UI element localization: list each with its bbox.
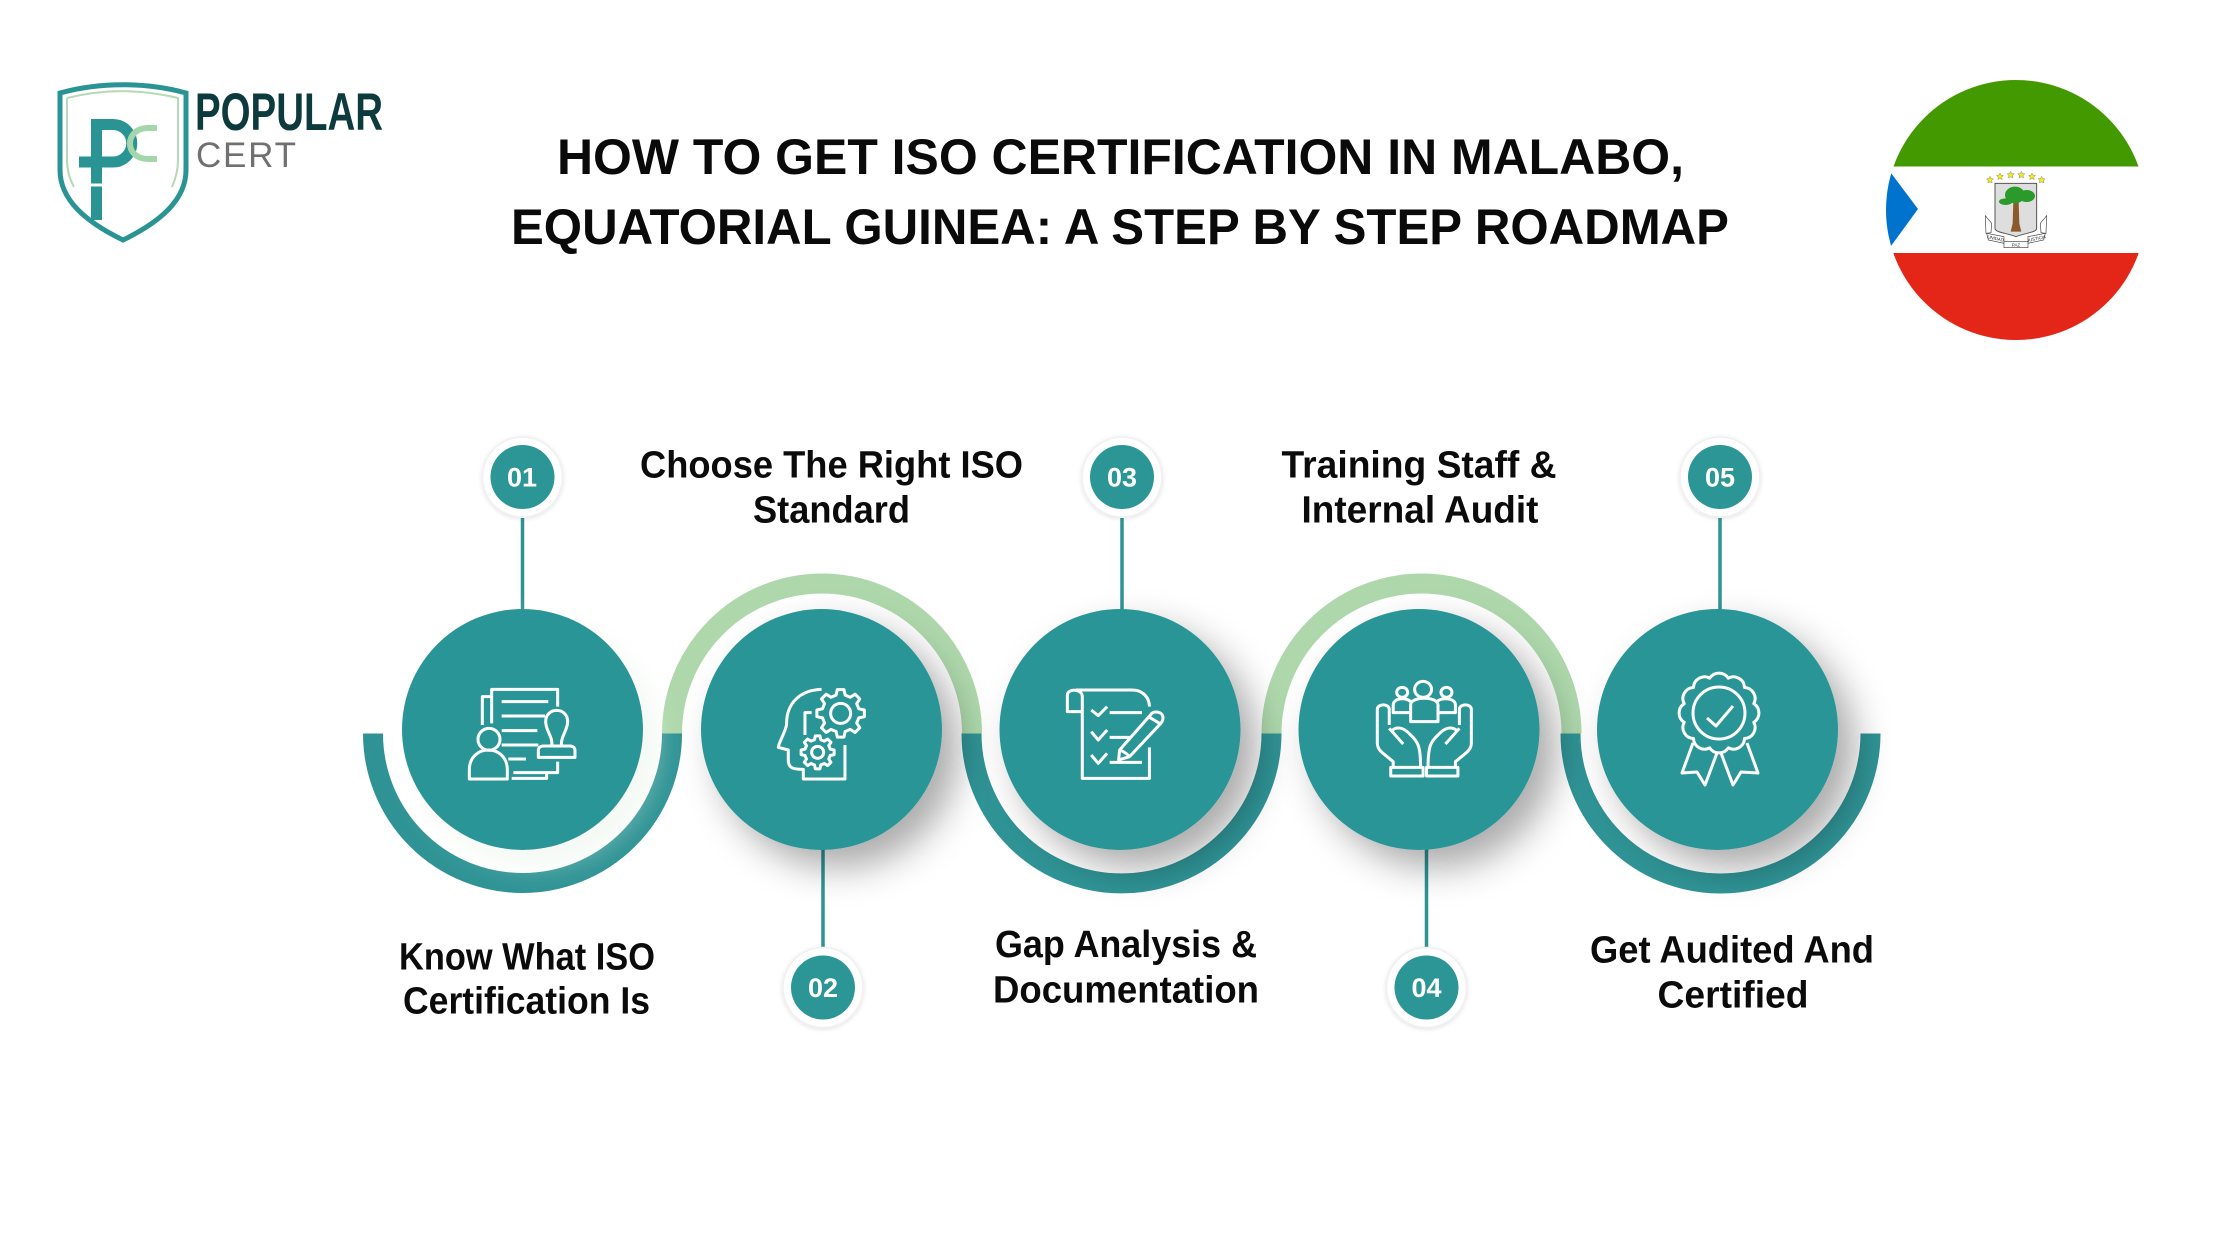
logo wordmark: POPULAR <box>195 83 383 142</box>
logo shield <box>60 85 186 240</box>
badge 03: 03 <box>1107 462 1137 492</box>
label: step 2 <box>640 444 1023 532</box>
icon: documents, person and stamp <box>469 689 575 779</box>
flag emblem <box>1985 171 2047 248</box>
label: step 2: Choose The Right ISO <box>640 444 1023 486</box>
step 5 circle <box>1597 609 1838 850</box>
icon: head with gears <box>778 689 864 779</box>
badge 02 <box>783 948 863 1028</box>
flag stripes <box>1886 80 2139 340</box>
step 3 circle <box>1000 609 1240 850</box>
step 2 circle <box>701 609 942 850</box>
title: HOW TO GET ISO CERTIFICATION IN MALABO, <box>557 129 1684 185</box>
flag emblem: JUSTICIA <box>2026 234 2046 243</box>
label: step 4: Internal Audit <box>1302 490 1539 532</box>
icon: hands holding team <box>1377 681 1471 776</box>
badge 01 <box>482 437 562 517</box>
label: step 3: Documentation <box>993 970 1259 1012</box>
badge 04: 04 <box>1411 973 1442 1003</box>
label: step 3 <box>993 924 1259 1012</box>
label: step 5 <box>1590 930 1874 1016</box>
logo wordmark <box>195 83 383 175</box>
label: step 5: Get Audited And <box>1590 930 1874 972</box>
flag emblem: UNIDAD <box>1987 234 2004 243</box>
step 4 circle <box>1298 609 1540 850</box>
connector lines <box>522 518 1720 947</box>
badge 04 <box>1386 948 1466 1028</box>
title: EQUATORIAL GUINEA: A STEP BY STEP ROADMAP <box>511 199 1729 255</box>
title <box>511 129 1729 255</box>
icon: award rosette <box>1679 673 1759 785</box>
label: step 3: Gap Analysis & <box>995 924 1257 966</box>
label: step 1: Certification Is <box>403 980 650 1022</box>
logo: Popular Cert <box>60 83 383 240</box>
badge 01: 01 <box>507 462 537 492</box>
label: step 4: Training Staff & <box>1282 444 1556 486</box>
label: step 1 <box>399 936 655 1022</box>
roadmap: wave arcs <box>373 584 1870 884</box>
step 1 circle <box>402 609 643 850</box>
badge 05 <box>1680 437 1760 517</box>
badge 05: 05 <box>1705 462 1735 492</box>
badge 02: 02 <box>808 973 838 1003</box>
icon: checklist and pencil <box>1067 690 1163 778</box>
label: step 4 <box>1282 444 1556 532</box>
flag emblem: PAZ <box>2012 243 2020 248</box>
flag: Equatorial Guinea <box>1886 80 2139 340</box>
badge 03 <box>1082 437 1162 517</box>
label: step 5: Certified <box>1658 974 1808 1016</box>
label: step 1: Know What ISO <box>399 936 655 978</box>
label: step 2: Standard <box>753 490 910 532</box>
logo wordmark: CERT <box>196 136 296 175</box>
